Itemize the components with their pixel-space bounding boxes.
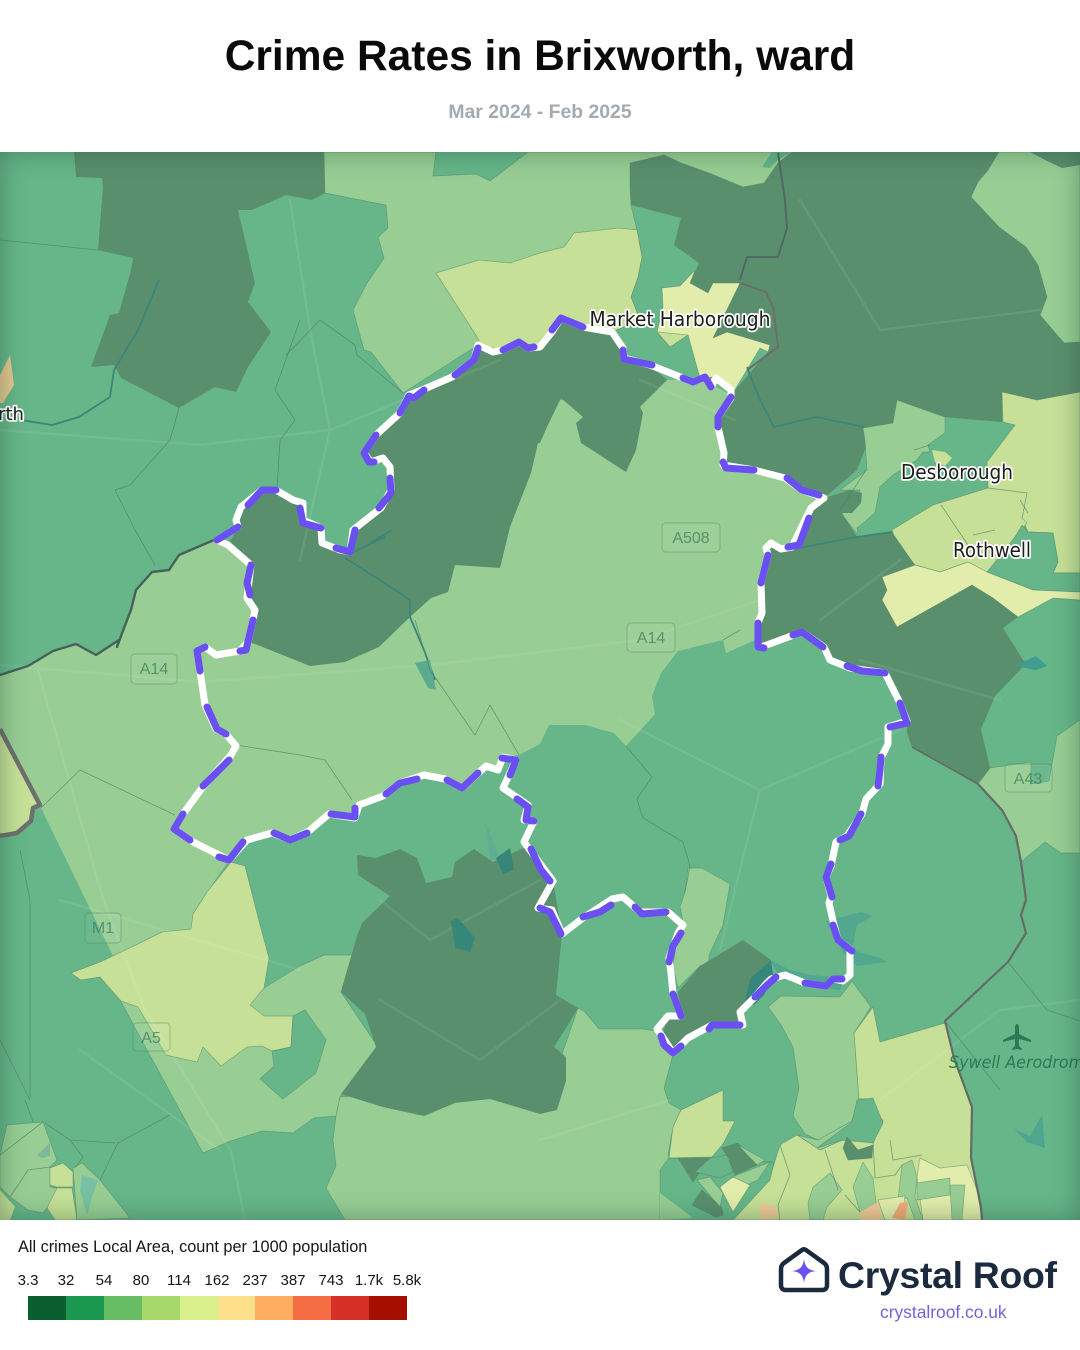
legend scale labels: 3.3 [18,1272,38,1289]
legend scale labels: 1.7k [355,1272,383,1289]
icon: house with star [778,1247,830,1292]
map edge vignette [0,152,1080,1220]
region: dark north of ward centre [228,318,667,666]
subtitle: date range: Mar 2024 - Feb 2025 [448,101,632,123]
legend title: All crimes Local Area, count per 1000 population [18,1238,367,1256]
region: Market Harborough pale [657,270,770,393]
road shield A14 west: A14 [140,661,168,678]
legend colour bar [28,1296,407,1320]
brand name: Crystal Roof [838,1254,1057,1296]
region: Desborough light [840,400,945,535]
legend scale labels: 5.8k [393,1272,421,1289]
region: dark corner marks top right [1030,152,1080,168]
region: dark east of ward [758,532,1036,784]
legend scale labels: 237 [242,1272,268,1289]
ward outline: white base [174,318,907,1053]
legend scale labels: 114 [167,1272,191,1289]
legend scale labels: 387 [280,1272,306,1289]
region: yellow block east [987,392,1080,573]
road shield M1 [85,913,121,943]
region: light south of ward east [768,981,871,1140]
road shield A5 [133,1023,170,1051]
road shield A508 [662,523,720,552]
legend scale labels: 80 [133,1272,149,1289]
road shield A43 [1005,764,1052,792]
rivers and water [21,280,1047,1148]
region: light band south west [120,955,378,1153]
region: light band south centre [326,1008,700,1220]
region: pale enclave inside ward south east [673,868,730,988]
urban neighbourhoods south east [660,1098,982,1220]
region: light band top centre [324,152,792,393]
legend scale labels: 162 [204,1272,230,1289]
region: yellow east of aerodrome boundary [700,1007,982,1220]
region: west and central light band [0,378,824,958]
region: yellow area north of ward [436,228,642,350]
website: crystalroof.co.uk [880,1302,1007,1322]
legend [18,1238,422,1320]
legend scale labels [18,1272,422,1289]
road shield A43: A43 [1014,771,1042,788]
legend scale labels: 743 [318,1272,344,1289]
county boundary lines [0,153,1026,1220]
roads [0,200,1080,1220]
region: Rothwell mid [987,525,1080,592]
region: dark pocket by Desborough [799,490,862,548]
region: Desborough yellow spot [932,450,952,466]
road shield M1: M1 [92,920,114,937]
logo: Crystal Roof [778,1247,1058,1322]
region: dark north west block [74,152,325,408]
region: Rothwell pale strip [882,562,1080,627]
road shield A14 centre [627,623,675,652]
choropleth map [0,152,1080,1220]
region: small yellow pocket [669,1090,735,1158]
icon: airplane [1003,1024,1031,1050]
ward outline: purple dashes [174,318,907,1053]
road shield A508: A508 [672,530,710,547]
road shield A5: A5 [141,1030,161,1047]
road shield A14 west [131,654,177,684]
region: county west pale block [0,729,40,833]
region: big dark north east [630,152,1080,498]
region: small mid sliver at top [762,152,792,168]
region: mid oval [260,1010,326,1099]
region: teal reservoir [745,960,773,1005]
legend scale labels: 54 [96,1272,112,1289]
region: light south small [797,1099,883,1150]
urban neighbourhoods south west [0,1100,170,1220]
region: light north east [971,152,1080,343]
label: Market Harborough: Market Harborough [590,307,770,331]
region: dark south block [341,846,578,1116]
label: Rothwell: Rothwell [953,538,1031,562]
region: Rothwell yellow [892,488,1027,572]
region: A43 light [978,720,1080,862]
road shield A14 centre: A14 [637,630,665,647]
region: yellow star south west [71,862,293,1066]
thin ward boundaries [0,240,1080,1100]
legend scale labels: 32 [58,1272,74,1289]
label: Desborough: Desborough [901,460,1013,484]
region: dark patch ward south east [662,940,771,1053]
region: Market Harborough yellow pocket [657,332,688,347]
title: Crime Rates in Brixworth, ward [225,33,855,80]
region: tan area far left [0,355,14,403]
